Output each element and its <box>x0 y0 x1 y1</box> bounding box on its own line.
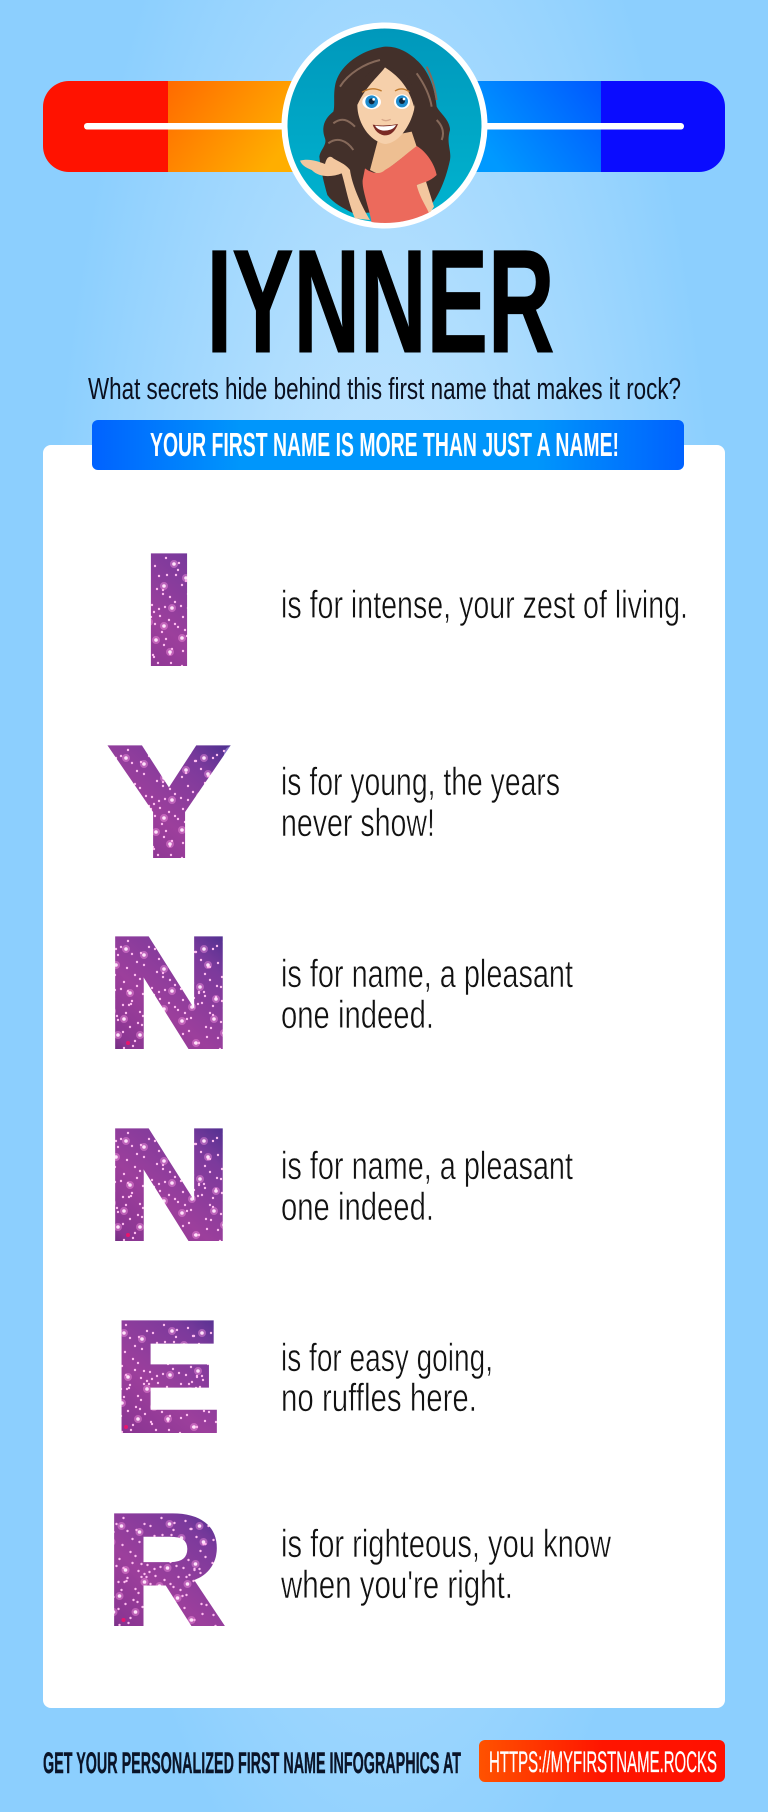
row 5: description: is for easy going, <box>281 1337 493 1380</box>
avatar smile <box>373 124 398 135</box>
row 4: description: one indeed. <box>281 1186 434 1229</box>
header bar: right indigo segment <box>601 81 725 172</box>
row 2: description: is for young, the years <box>281 761 560 804</box>
avatar neck <box>370 132 417 175</box>
row 2: description <box>281 761 560 845</box>
row 6: description: is for righteous, you know <box>281 1523 612 1566</box>
header bar: left orange segment <box>168 81 298 172</box>
footer url button <box>479 1740 725 1782</box>
header bar: white line <box>84 123 684 130</box>
avatar brows <box>362 89 409 92</box>
row 4: letter N: N <box>107 1098 231 1271</box>
row 5: description <box>281 1337 493 1420</box>
avatar shirt <box>363 146 437 223</box>
avatar nose <box>382 119 391 121</box>
row 4: description <box>281 1145 573 1229</box>
row 1: letter I: I <box>142 523 196 696</box>
avatar face <box>357 67 414 144</box>
row 3: description <box>281 953 573 1037</box>
white content panel <box>43 445 725 1708</box>
row 2: description: never show! <box>281 802 435 845</box>
row 5: letter E: E <box>114 1290 220 1463</box>
banner <box>92 420 684 470</box>
avatar eyes <box>362 95 381 109</box>
row 2: letter Y: Y <box>110 715 228 888</box>
row 6: description: when you're right. <box>280 1564 513 1607</box>
title: IYNNER <box>206 220 554 384</box>
avatar arm and hand <box>300 157 370 220</box>
row 5: description: no ruffles here. <box>281 1377 477 1420</box>
row 3: letter N: N <box>107 906 231 1079</box>
avatar portrait <box>282 22 488 228</box>
row 4: description: is for name, a pleasant <box>281 1145 573 1188</box>
row 3: description: is for name, a pleasant <box>281 953 573 996</box>
row 3: description: one indeed. <box>281 994 434 1037</box>
header bar: left red segment <box>43 81 168 172</box>
avatar hair <box>319 47 450 213</box>
row 6: description <box>280 1523 612 1607</box>
header bar: right blue segment <box>470 81 601 172</box>
row 6: letter R: R <box>106 1483 222 1656</box>
